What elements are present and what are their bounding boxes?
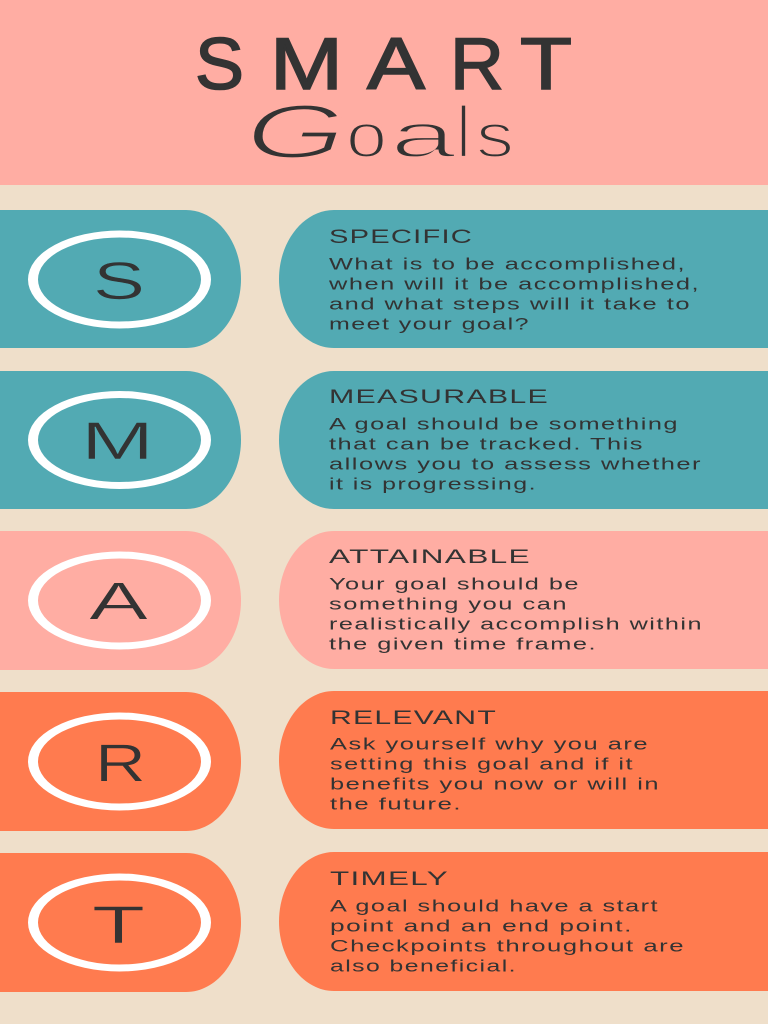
letter A: A xyxy=(89,572,149,631)
panel: letter S xyxy=(0,210,241,348)
row: A xyxy=(0,531,768,670)
panel: attainable xyxy=(279,531,768,669)
subtitle: Goals: o xyxy=(346,102,387,171)
icon: ring M xyxy=(28,391,211,489)
text: specific xyxy=(328,254,700,334)
panel: letter M xyxy=(0,371,241,509)
text: attainable xyxy=(329,574,703,654)
text: measurable: it is progressing. xyxy=(329,474,537,494)
icon: ring R xyxy=(28,712,211,811)
panel: specific xyxy=(279,210,768,348)
icon: ring A xyxy=(28,552,211,650)
title: SMART xyxy=(195,24,572,105)
text: specific: meet your goal? xyxy=(329,314,530,334)
title: SMART: A xyxy=(367,24,425,105)
icon: ring T xyxy=(28,874,211,972)
heading: relevant: RELEVANT xyxy=(330,708,497,729)
heading: attainable: ATTAINABLE xyxy=(329,547,531,568)
heading: timely: TIMELY xyxy=(330,869,449,890)
text: specific: and what steps will it take to xyxy=(329,294,691,314)
title: SMART: R xyxy=(450,24,504,105)
title: SMART: S xyxy=(195,24,244,105)
text: timely: point and an end point. xyxy=(330,916,633,936)
text: relevant: Ask yourself why you are xyxy=(330,734,649,754)
row: S xyxy=(0,210,768,348)
subtitle: Goals xyxy=(246,90,514,175)
text: specific: when will it be accomplished, xyxy=(328,274,700,294)
text: relevant: the future. xyxy=(330,794,462,814)
letter R: R xyxy=(95,734,146,793)
text: attainable: Your goal should be xyxy=(329,574,580,594)
subtitle: Goals: s xyxy=(476,102,514,171)
row: T xyxy=(0,852,768,992)
panel: timely xyxy=(279,852,768,991)
text: measurable xyxy=(329,414,702,494)
text: timely: Checkpoints throughout are xyxy=(330,936,685,956)
text: measurable: allows you to assess whether xyxy=(329,454,702,474)
text: timely: A goal should have a start xyxy=(330,896,659,916)
text: relevant: benefits you now or will in xyxy=(330,774,660,794)
text: attainable: something you can xyxy=(329,594,568,614)
text: measurable: A goal should be something xyxy=(329,414,679,434)
panel: letter A xyxy=(0,531,241,670)
subtitle: Goals: l xyxy=(457,93,470,173)
letter M: M xyxy=(81,412,154,471)
text: measurable: that can be tracked. This xyxy=(329,434,644,454)
panel: relevant xyxy=(279,691,768,829)
title: SMART: T xyxy=(520,24,572,105)
text: relevant xyxy=(330,734,660,814)
letter T: T xyxy=(92,896,145,955)
row: M xyxy=(0,371,768,509)
title: SMART: M xyxy=(270,24,343,105)
panel: measurable xyxy=(279,371,768,509)
text: attainable: realistically accomplish within xyxy=(329,614,703,634)
text: timely xyxy=(330,896,685,976)
panel: header xyxy=(0,0,768,185)
subtitle: Goals: a xyxy=(390,102,457,171)
text: timely: also beneficial. xyxy=(330,956,517,976)
icon: ring S xyxy=(28,230,211,328)
text: specific: What is to be accomplished, xyxy=(329,254,686,274)
row: R xyxy=(0,691,768,831)
panel: letter R xyxy=(0,692,241,831)
text: attainable: the given time frame. xyxy=(329,634,597,654)
subtitle: Goals: G xyxy=(246,90,345,175)
panel: letter T xyxy=(0,853,241,992)
heading: measurable: MEASURABLE xyxy=(329,387,549,408)
heading: specific: SPECIFIC xyxy=(329,227,473,248)
letter S: S xyxy=(93,252,145,311)
text: relevant: setting this goal and if it xyxy=(330,754,634,774)
